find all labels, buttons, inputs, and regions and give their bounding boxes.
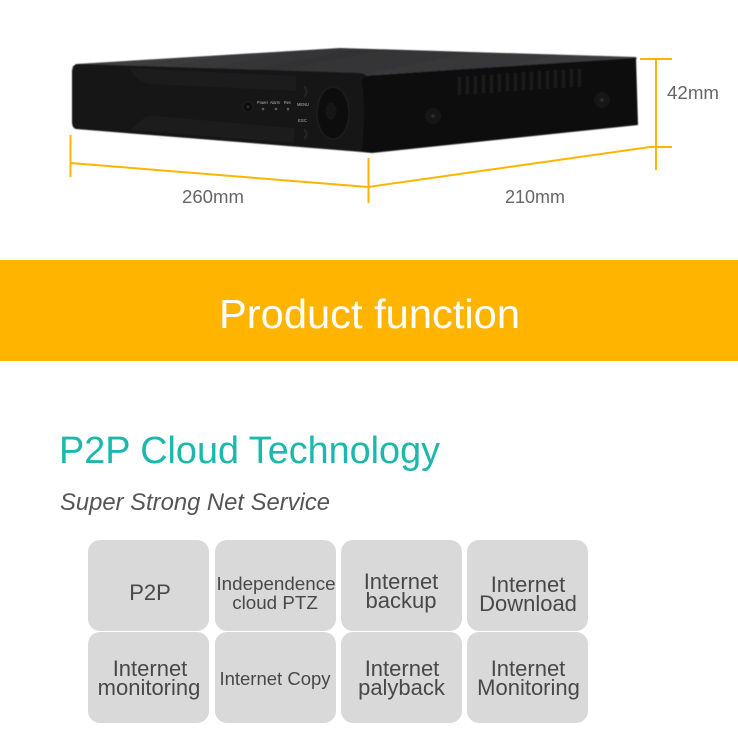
tile: Internet monitoring: monitoring [98, 675, 200, 700]
tile: Internet Monitoring: Monitoring [477, 675, 580, 700]
tile: Internet backup: backup [366, 588, 436, 613]
LED labels: Alarm [270, 100, 280, 105]
front power key [243, 102, 253, 112]
section subheading: Super Strong Net Service [60, 489, 330, 516]
tile: Independence cloud PTZ: cloud PTZ [232, 592, 318, 613]
dimension lines [70, 59, 672, 203]
LED labels [257, 100, 309, 123]
lower front grille [130, 116, 294, 143]
front panel [72, 64, 369, 152]
LED labels: Rec [284, 100, 292, 105]
tile: Internet monitoring: Internet [113, 656, 187, 681]
LED labels: Power [257, 100, 268, 105]
dimension label: 260mm: 260mm [182, 186, 244, 207]
tile: Internet Download: Internet [491, 572, 565, 597]
side screws [425, 108, 441, 124]
upper front grille [130, 68, 296, 91]
LED lights [262, 108, 289, 110]
side vents [458, 69, 581, 95]
LED labels: ESC [298, 118, 308, 123]
tile: Internet payback: Internet [365, 656, 439, 681]
tile: Internet Monitoring: Internet [491, 656, 565, 681]
tile: Internet Copy: Internet Copy [219, 668, 331, 689]
side panel [362, 58, 638, 153]
tile: Independence cloud PTZ: Independence [216, 573, 336, 594]
LED labels: MENU [297, 102, 309, 107]
feature tiles [88, 540, 588, 723]
dimension label: 210mm: 210mm [505, 187, 565, 207]
banner heading: Product function [219, 291, 520, 337]
top surface [72, 48, 637, 76]
tile: P2P: P2P [129, 580, 171, 605]
dimension label: 42mm: 42mm [667, 82, 719, 103]
navigation pad [317, 87, 349, 139]
section heading: P2P Cloud Technology [59, 430, 440, 472]
tile: Internet backup: Internet [364, 569, 438, 594]
banner [0, 260, 738, 361]
tile: Internet payback: palyback [358, 675, 446, 700]
tile: Internet Download: Download [479, 591, 577, 616]
product photo: DVR recorder [72, 48, 638, 153]
